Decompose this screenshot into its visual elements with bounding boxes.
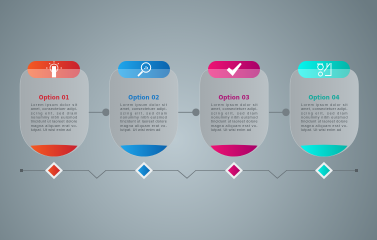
text: option 01 bbox=[31, 103, 78, 132]
text: option 02 bbox=[120, 103, 168, 132]
timeline bbox=[20, 163, 358, 178]
icon: magnifier bbox=[138, 63, 151, 76]
title: option 03: Option 03 bbox=[218, 94, 250, 102]
icon pill: option 04 bbox=[298, 61, 350, 78]
title: option 01: Option 01 bbox=[39, 94, 69, 102]
marker: option 01 bbox=[46, 163, 62, 178]
icon: check mark bbox=[227, 63, 242, 76]
panel: option 03 bbox=[200, 61, 268, 156]
icon: chart and tools bbox=[317, 63, 331, 76]
panel: option 04 bbox=[290, 61, 358, 156]
title: option 04: Option 04 bbox=[308, 94, 340, 102]
text: option 03 bbox=[211, 103, 258, 132]
title: option 02: Option 02 bbox=[128, 94, 159, 102]
icon pill: option 01 bbox=[28, 61, 80, 78]
bottom cap: option 04 bbox=[300, 145, 348, 156]
icon: light bulb bbox=[46, 61, 62, 77]
panel: option 02 bbox=[110, 61, 178, 156]
icon pill: option 02 bbox=[118, 61, 170, 78]
text: option 04 bbox=[301, 103, 348, 132]
connectors between panels bbox=[88, 108, 290, 116]
bottom cap: option 02 bbox=[120, 145, 167, 156]
panel: option 01 bbox=[20, 61, 88, 156]
bottom cap: option 01 bbox=[30, 145, 78, 156]
marker: option 03 bbox=[226, 163, 242, 178]
icon pill: option 03 bbox=[208, 61, 260, 78]
bottom cap: option 03 bbox=[210, 145, 258, 156]
marker: option 02 bbox=[136, 163, 152, 178]
marker: option 04 bbox=[316, 163, 332, 178]
